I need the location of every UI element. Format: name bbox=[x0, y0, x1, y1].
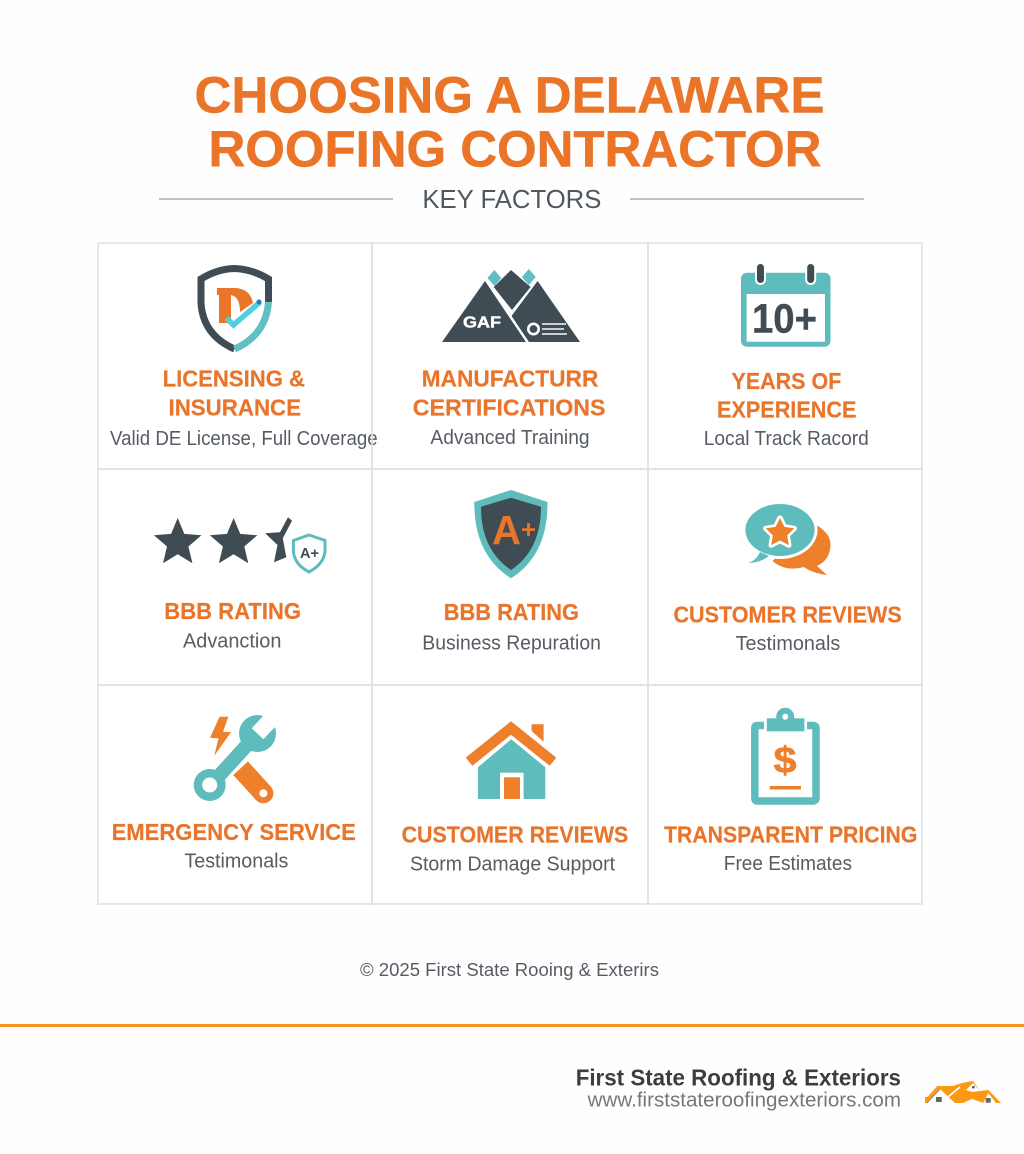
description: Free Estimates bbox=[724, 853, 852, 875]
panel: licensing and insurance bbox=[98, 243, 378, 469]
heading: EMERGENCY SERVICE bbox=[112, 819, 356, 845]
heading: BBB RATING bbox=[444, 599, 579, 625]
panel: transparent pricing bbox=[648, 685, 922, 904]
icon: stars and small shield: A+ bbox=[300, 545, 319, 562]
description: Advanced Training bbox=[430, 427, 590, 449]
panel: customer reviews bbox=[648, 469, 922, 685]
icon: wrench, hammer and bolt bbox=[194, 708, 285, 803]
panel: manufacturer certifications bbox=[372, 243, 648, 469]
description: Local Track Racord bbox=[704, 428, 869, 450]
description: Advanction bbox=[183, 630, 281, 652]
heading: CUSTOMER REVIEWS bbox=[674, 602, 902, 628]
title: CHOOSING A DELAWARE bbox=[194, 66, 824, 123]
icon: clipboard with dollar bbox=[755, 708, 816, 801]
footer accent line bbox=[0, 1024, 1024, 1027]
panel: emergency service bbox=[98, 685, 372, 904]
footer brand text: First State Roofing & Exteriors bbox=[576, 1065, 901, 1091]
subtitle: key factors: KEY FACTORS bbox=[422, 184, 601, 214]
title: ROOFING CONTRACTOR bbox=[208, 121, 822, 178]
icon: A+ shield bbox=[474, 490, 548, 578]
icon: mountains badge: GAF bbox=[463, 315, 501, 332]
icon: stars and small shield bbox=[154, 517, 325, 572]
heading line 2: EXPERIENCE bbox=[717, 396, 856, 422]
factors grid bbox=[98, 243, 922, 904]
panel: years of experience bbox=[648, 243, 922, 469]
icon: calendar 10+ bbox=[741, 262, 830, 347]
heading: BBB RATING bbox=[164, 598, 301, 624]
icon: shield with check bbox=[201, 268, 268, 349]
panel: storm damage support bbox=[372, 685, 648, 904]
heading: MANUFACTURR bbox=[422, 366, 599, 392]
heading: CUSTOMER REVIEWS bbox=[402, 822, 628, 848]
icon: mountains badge bbox=[442, 269, 580, 342]
heading line 2: CERTIFICATIONS bbox=[413, 395, 606, 421]
footer logo: rooftops bbox=[925, 1081, 1001, 1103]
icon: clipboard with dollar: $ bbox=[774, 740, 797, 780]
footer brand text bbox=[576, 1065, 901, 1112]
footer brand text: www.firststateroofingexteriors.com bbox=[587, 1090, 901, 1112]
heading: YEARS OF bbox=[732, 368, 841, 394]
panel: BBB rating shield bbox=[372, 469, 648, 685]
title bbox=[194, 66, 824, 178]
description: Testimonals bbox=[736, 633, 840, 655]
icon: house bbox=[469, 724, 553, 799]
icon: A+ shield: + bbox=[521, 516, 536, 544]
heading line 2: INSURANCE bbox=[168, 395, 301, 421]
description: Testimonals bbox=[184, 851, 288, 873]
description: Valid DE License, Full Coverage bbox=[110, 428, 378, 450]
panel: BBB rating stars bbox=[98, 469, 372, 685]
heading: TRANSPARENT PRICING bbox=[664, 822, 917, 848]
icon: speech bubbles bbox=[742, 501, 831, 575]
icon: calendar 10+: 10+ bbox=[752, 296, 817, 342]
description: Business Repuration bbox=[422, 632, 601, 654]
description: Storm Damage Support bbox=[410, 854, 615, 876]
icon: A+ shield: A bbox=[492, 507, 521, 553]
copyright note: © 2025 First State Rooing & Exterirs bbox=[360, 960, 659, 980]
heading: LICENSING & bbox=[163, 366, 305, 392]
